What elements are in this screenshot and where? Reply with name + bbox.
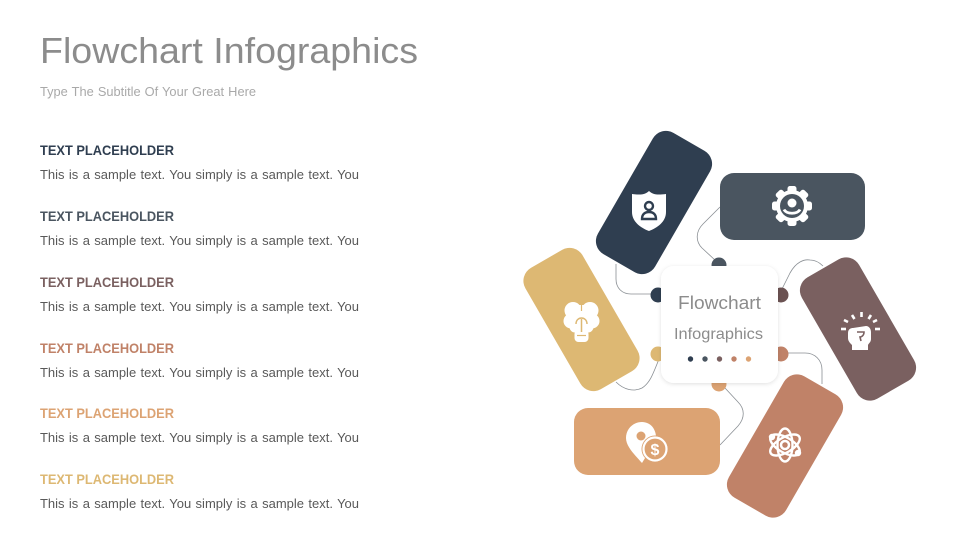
text block 1: This is a sample text. You simply is a sample text. You [40, 167, 359, 182]
icon: fist with rays [841, 312, 880, 350]
text block 5 [40, 405, 359, 445]
text block 1: TEXT PLACEHOLDER [40, 142, 174, 158]
text block 2 [40, 208, 359, 248]
text block 2: This is a sample text. You simply is a sample text. You [40, 233, 359, 248]
connector dot: mauve [774, 288, 788, 302]
connector dot: slate [712, 258, 726, 272]
connector dot: orange [712, 376, 726, 392]
title: Flowchart Infographics [40, 30, 418, 71]
text list [40, 142, 359, 511]
text block 6: This is a sample text. You simply is a sample text. You [40, 496, 359, 511]
card: terracotta atom [721, 369, 849, 523]
center panel [661, 266, 778, 383]
text block 5: This is a sample text. You simply is a sample text. You [40, 430, 359, 445]
icon: brain bulb [564, 302, 600, 342]
card: orange pin [574, 408, 720, 475]
card: tan brain [518, 242, 645, 397]
icon: location pin with dollar coin [626, 422, 668, 463]
text block 4 [40, 340, 359, 380]
center dots [688, 356, 751, 362]
text block 6: TEXT PLACEHOLDER [40, 471, 174, 487]
icon: atom [767, 428, 803, 462]
subtitle: Type The Subtitle Of Your Great Here [40, 84, 256, 99]
text block 5: TEXT PLACEHOLDER [40, 405, 174, 421]
text block 3: This is a sample text. You simply is a sample text. You [40, 299, 359, 314]
card: navy shield [590, 125, 718, 280]
text block 4: This is a sample text. You simply is a sample text. You [40, 365, 359, 380]
connector dot: tan [650, 346, 666, 362]
text block 3 [40, 274, 359, 314]
center heading: Flowchart [678, 293, 761, 313]
icon: shield with person [632, 191, 666, 231]
card: mauve fist [794, 252, 922, 406]
text block 1 [40, 142, 359, 182]
text block 3: TEXT PLACEHOLDER [40, 274, 174, 290]
icon: location pin with dollar coin: $ [651, 442, 660, 459]
flowchart diagram [518, 125, 922, 523]
text block 2: TEXT PLACEHOLDER [40, 208, 174, 224]
connector dot: navy [650, 288, 666, 302]
connector dot: terracotta [774, 346, 788, 362]
connector lines [616, 207, 823, 445]
text block 6 [40, 471, 359, 511]
card: slate gear [720, 173, 865, 240]
text block 4: TEXT PLACEHOLDER [40, 340, 174, 356]
icon: gear with person [772, 186, 812, 226]
center subheading: Infographics [674, 326, 763, 343]
